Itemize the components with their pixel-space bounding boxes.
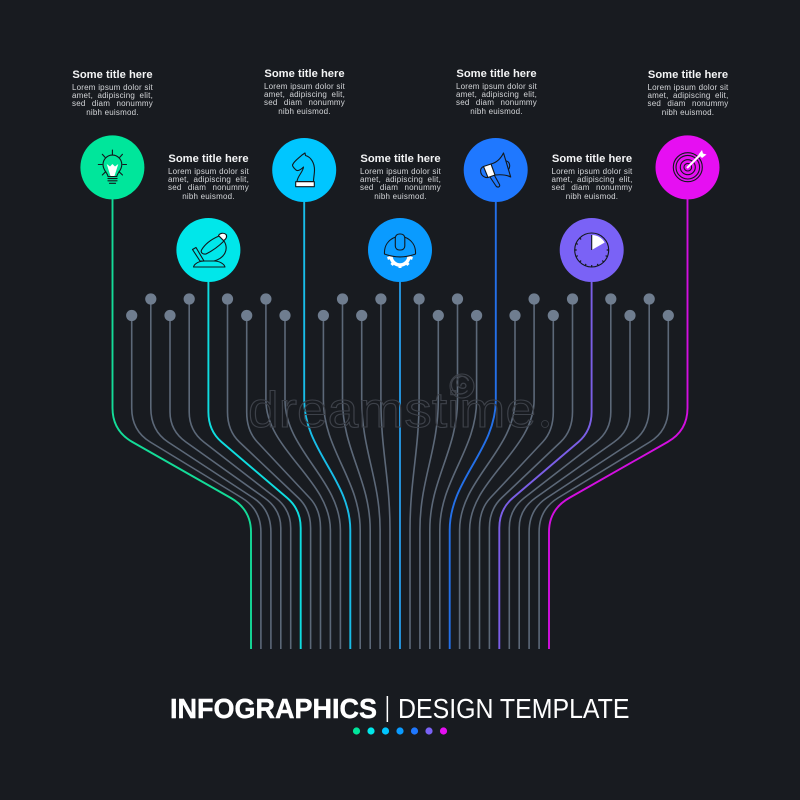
text block 3 [264,68,345,116]
text block 5: Lorem ipsum dolor sit [456,82,537,90]
text block 4: nibh euismod. [374,192,427,201]
text block 2: Lorem ipsum dolor sit [168,166,249,176]
text block 5: Some title here [456,68,537,80]
icon: target with arrow [673,150,706,182]
main title: DESIGN TEMPLATE [398,693,630,724]
text block 1 [72,69,153,117]
icon: pie timer [575,233,609,267]
icon: chess knight [292,153,314,187]
circle: cyan microscope [176,218,240,282]
icon: helmet with gear [384,234,416,268]
text block 1: sed diam nonummy [72,99,153,108]
text block 6: sed diam nonummy [552,183,632,192]
text block 4: amet, adipiscing elit, [360,175,441,184]
text block 4: sed diam nonummy [360,183,441,192]
text block 6: nibh euismod. [566,192,618,201]
text block 1: nibh euismod. [86,108,139,117]
text block 3: sed diam nonummy [264,98,345,107]
text block 2: amet, adipiscing elit, [168,175,249,184]
text block 2: nibh euismod. [182,192,235,201]
text block 4: Some title here [360,153,441,165]
circle: magenta target [656,135,720,199]
text block 3: Lorem ipsum dolor sit [264,82,345,90]
text block 6 [552,153,632,201]
grey line end dots [126,293,674,321]
text block 5: amet, adipiscing elit, [456,90,537,99]
grey connector lines [132,299,668,649]
text block 1: Lorem ipsum dolor sit [72,82,153,92]
coloured connector lines [112,199,688,649]
icon: megaphone [481,153,511,187]
icon: microscope [192,233,227,267]
text block 6: Lorem ipsum dolor sit [552,166,632,176]
text block 7: nibh euismod. [662,108,714,117]
text block 6: amet, adipiscing elit, [552,175,632,184]
text block 5 [456,68,537,116]
text block 2 [168,153,249,201]
text block 7: amet, adipiscing elit, [648,91,728,100]
text block 6: Some title here [552,153,632,165]
text block 7: Some title here [648,69,728,81]
text block 3: amet, adipiscing elit, [264,90,345,99]
watermark: dreamstime [248,382,536,438]
circle: sky blue strategy [272,138,336,202]
text block 7 [648,69,728,117]
text block 1: amet, adipiscing elit, [72,91,153,100]
text block 1: Some title here [72,69,153,81]
circle: purple clock [560,218,624,282]
colour dots [353,727,447,735]
text block 3: Some title here [264,68,345,80]
text block 2: sed diam nonummy [168,183,249,192]
circle: royal blue megaphone [464,138,528,202]
text block 5: sed diam nonummy [456,98,537,107]
text block 4: Lorem ipsum dolor sit [360,166,441,176]
circle: green idea [80,135,144,199]
text block 7: sed diam nonummy [648,99,728,108]
text block 2: Some title here [168,153,249,165]
text block 3: nibh euismod. [278,107,331,116]
main title [170,693,630,724]
text block 4 [360,153,441,201]
main title: INFOGRAPHICS [170,693,377,724]
text block 7: Lorem ipsum dolor sit [648,82,728,92]
circle: blue engineering [368,218,432,282]
icon: light bulb [98,150,126,183]
text block 5: nibh euismod. [470,107,523,116]
